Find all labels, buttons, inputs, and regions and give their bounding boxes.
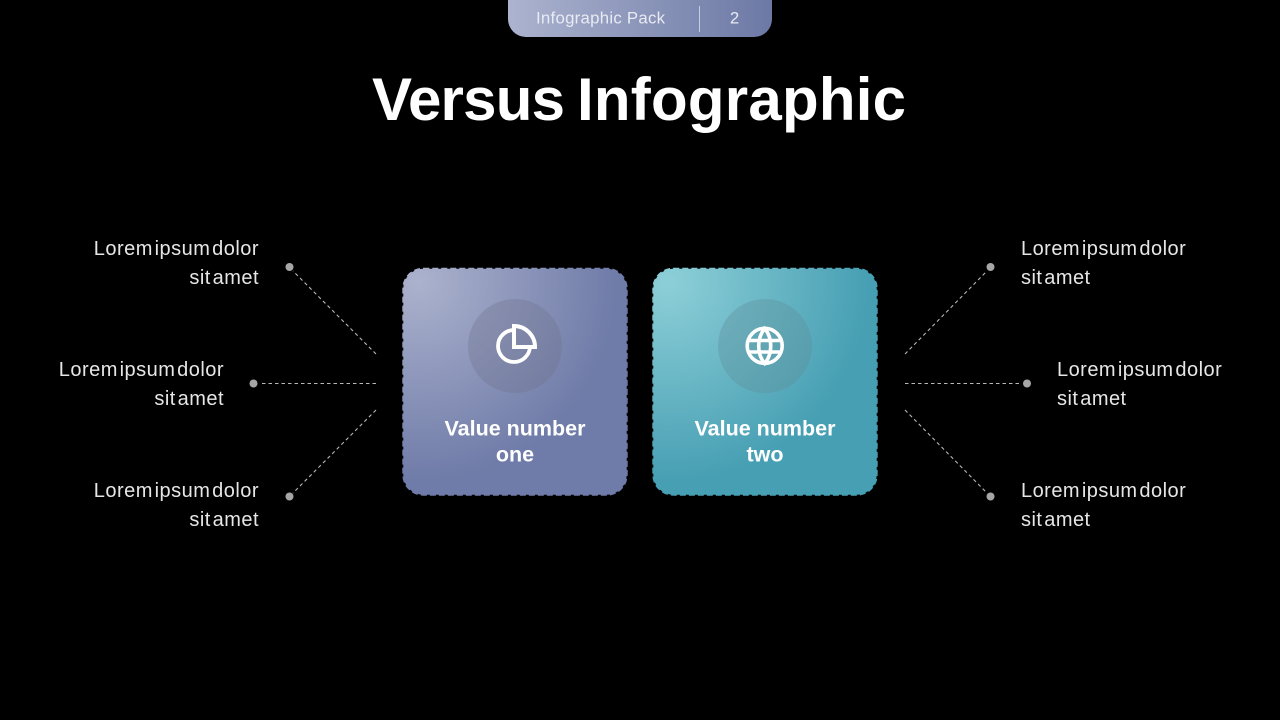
left callout: bottom: sit amet — [189, 509, 259, 531]
right callout: middle: Lorem ipsum dolor — [1057, 359, 1222, 381]
card label: one — [496, 442, 534, 466]
right callout: middle — [905, 359, 1222, 410]
right callout: top — [905, 238, 1186, 354]
left callout: top — [94, 238, 376, 354]
left callout: middle — [59, 359, 376, 410]
left callout: middle: sit amet — [154, 388, 224, 410]
tab label: Infographic Pack — [536, 8, 666, 28]
right callout: middle: sit amet — [1057, 388, 1127, 410]
left callout: middle: Lorem ipsum dolor — [59, 359, 224, 381]
title: Versus — [372, 66, 565, 133]
right callout: top: sit amet — [1021, 267, 1091, 289]
page number: 2 — [730, 8, 739, 28]
card label: Value number — [444, 416, 586, 440]
title: Infographic — [577, 66, 906, 133]
icon: globe — [718, 299, 812, 393]
card: value number one — [403, 269, 627, 495]
left callout: top: Lorem ipsum dolor — [94, 238, 259, 260]
left callout: bottom — [94, 410, 376, 531]
right callout: bottom — [905, 410, 1186, 531]
header tab — [508, 0, 772, 37]
right callout: bottom: Lorem ipsum dolor — [1021, 480, 1186, 502]
card label: Value number — [694, 416, 836, 440]
left callout: bottom: Lorem ipsum dolor — [94, 480, 259, 502]
right callout: top: Lorem ipsum dolor — [1021, 238, 1186, 260]
card label: two — [746, 442, 784, 466]
right callout: bottom: sit amet — [1021, 509, 1091, 531]
right callouts — [905, 238, 1222, 531]
left callouts — [59, 238, 376, 531]
left callout: top: sit amet — [189, 267, 259, 289]
card: value number two — [653, 269, 877, 495]
icon: pie chart — [468, 299, 562, 393]
